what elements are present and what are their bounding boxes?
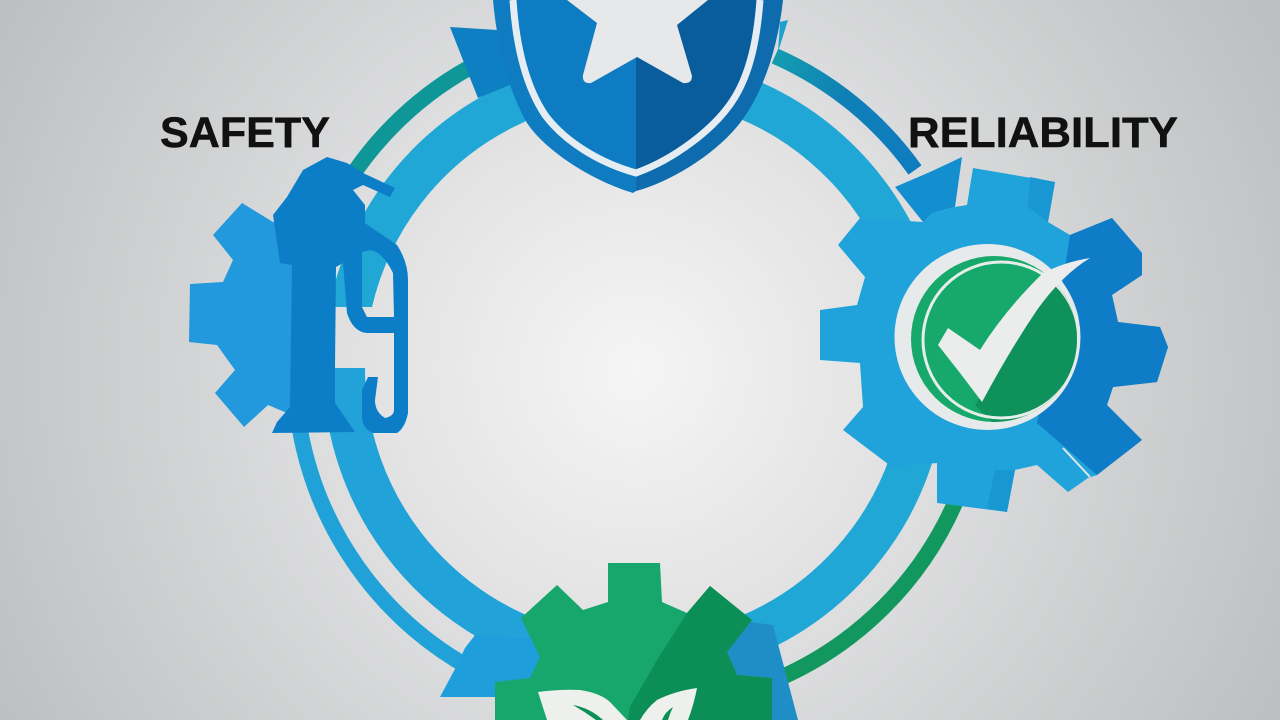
right leaf bbox=[640, 688, 697, 720]
arrowhead top left bbox=[450, 27, 515, 98]
check mark bbox=[938, 258, 1090, 402]
heading: reliability: RELIABILITY bbox=[908, 109, 1178, 157]
gear body bbox=[820, 168, 1168, 512]
outer arc bottom right bbox=[780, 503, 955, 678]
icon: bottom gear with leaves bbox=[495, 563, 772, 720]
outer arc bottom left bbox=[300, 430, 470, 668]
dark teeth bbox=[1037, 218, 1168, 475]
inner arc bottom left bbox=[344, 368, 560, 649]
inner arc top right bbox=[700, 84, 905, 260]
outer arc top left bbox=[340, 62, 480, 195]
outer arc top right bbox=[775, 56, 915, 170]
arrowhead top right bbox=[778, 20, 788, 52]
check badge bbox=[894, 244, 1100, 430]
bottom tooth shade bbox=[987, 470, 1015, 512]
fuel pump bbox=[272, 157, 408, 433]
icon: right gear with check bbox=[820, 168, 1168, 512]
inner arc bottom right bbox=[745, 447, 915, 637]
icon: shield with star bbox=[493, 0, 783, 193]
cycle ring bbox=[300, 56, 955, 678]
left leaf vein bbox=[573, 705, 603, 720]
inner arc top left bbox=[336, 85, 526, 307]
heading: safety: SAFETY bbox=[160, 109, 330, 157]
icon: left gear with fuel pump bbox=[189, 157, 408, 433]
arrowhead bottom right bbox=[725, 622, 798, 720]
arrowheads bbox=[440, 20, 962, 720]
dark facet bbox=[628, 586, 772, 720]
top tooth shade bbox=[1028, 177, 1055, 222]
arrowhead right bbox=[895, 157, 962, 222]
arrowhead bottom left bbox=[440, 635, 545, 697]
star bbox=[567, 0, 708, 83]
gear body bbox=[495, 563, 772, 720]
left leaf bbox=[538, 690, 627, 720]
left gear bbox=[189, 203, 300, 427]
tooth edge highlight bbox=[1063, 448, 1090, 477]
right leaf vein bbox=[662, 707, 673, 720]
